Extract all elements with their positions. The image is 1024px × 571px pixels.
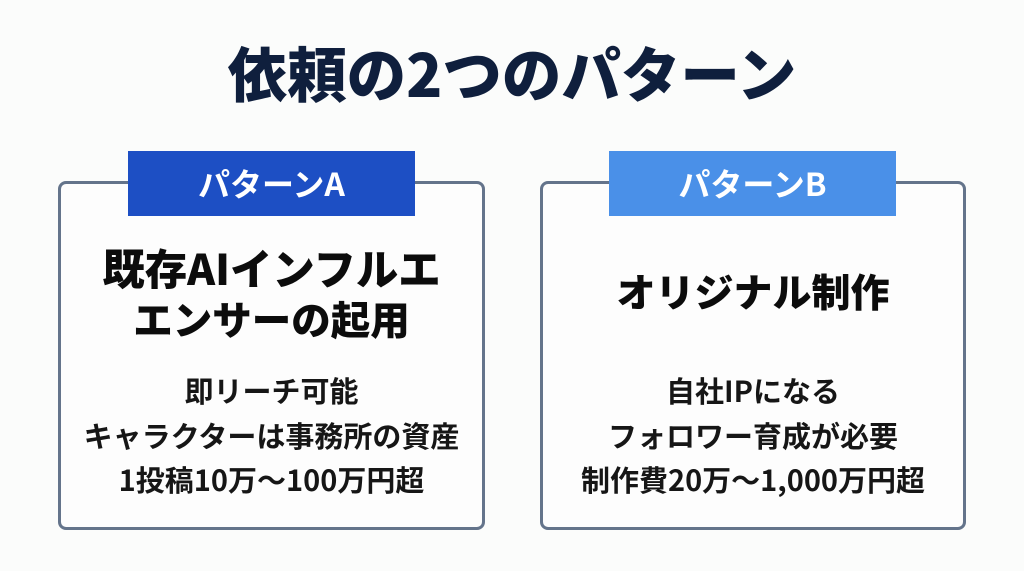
text block: pattern B details — [581, 369, 925, 500]
heading: pattern B title: オリジナル制作 — [616, 263, 890, 319]
text block: pattern A details: 即リーチ可能 — [184, 369, 358, 411]
heading: pattern A title — [102, 237, 441, 347]
title: 依頼の2つのパターン — [228, 29, 796, 115]
tab: pattern B: パターンB — [678, 160, 827, 206]
text block: pattern A details: 1投稿10万～100万円超 — [119, 458, 424, 500]
text block: pattern B details: 制作費20万～1,000万円超 — [581, 458, 925, 500]
text block: pattern B details: フォロワー育成が必要 — [608, 414, 898, 456]
tab: pattern B — [609, 151, 896, 216]
text block: pattern A details — [84, 369, 459, 500]
text block: pattern B details: 自社IPになる — [666, 369, 840, 411]
heading: pattern A title: エンサーの起用 — [133, 290, 410, 347]
panel: pattern B — [540, 181, 966, 530]
tab: pattern A: パターンA — [198, 160, 345, 206]
heading: pattern A title: 既存AIインフルエ — [102, 237, 441, 298]
text block: pattern A details: キャラクターは事務所の資産 — [84, 414, 459, 456]
tab: pattern A — [128, 151, 415, 216]
panel: pattern A — [58, 181, 485, 530]
